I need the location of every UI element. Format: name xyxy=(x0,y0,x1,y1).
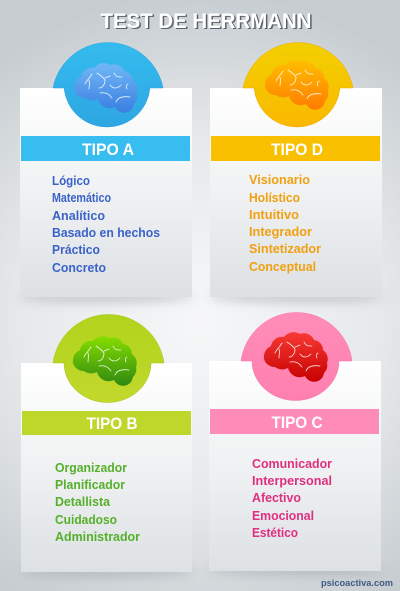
list A: Práctico xyxy=(52,242,100,257)
list B: Detallista xyxy=(55,494,111,509)
list A: Lógico xyxy=(52,173,90,188)
list D: Conceptual xyxy=(249,259,316,274)
icon: brain D xyxy=(265,60,329,110)
band A xyxy=(21,136,190,161)
title: TEST DE HERRMANN xyxy=(102,11,313,34)
heading D: TIPO D xyxy=(271,140,323,159)
card C xyxy=(209,361,381,571)
list A: Concreto xyxy=(52,260,106,275)
list B: Administrador xyxy=(55,529,140,544)
list D: Visionario xyxy=(249,172,310,187)
panel: tipo D xyxy=(208,43,384,303)
panel: tipo B xyxy=(19,314,195,578)
card A xyxy=(20,88,192,297)
list D: Holístico xyxy=(249,190,300,205)
icon: circle B xyxy=(53,314,164,402)
card B xyxy=(21,363,192,572)
icon: circle D xyxy=(243,43,353,127)
list A xyxy=(52,173,160,275)
list C xyxy=(252,456,332,540)
list B: Organizador xyxy=(55,460,127,475)
icon: circle A xyxy=(53,43,163,127)
icon: circle C xyxy=(241,312,352,400)
list C: Estético xyxy=(252,525,298,540)
list B: Cuidadoso xyxy=(55,512,117,527)
list C: Emocional xyxy=(252,508,314,523)
list B xyxy=(55,460,140,544)
card D xyxy=(210,88,382,297)
panel: tipo C xyxy=(207,312,383,576)
heading B: TIPO B xyxy=(86,414,138,433)
list D: Intuitivo xyxy=(249,207,299,222)
heading C: TIPO C xyxy=(272,413,322,432)
list D: Sintetizador xyxy=(249,241,321,256)
icon: brain C xyxy=(264,332,328,382)
title: TEST DE HERRMANN xyxy=(100,10,312,33)
list B: Planificador xyxy=(55,477,125,492)
list C: Afectivo xyxy=(252,490,301,505)
list A: Analítico xyxy=(52,208,105,223)
band C xyxy=(210,409,379,434)
list A: Basado en hechos xyxy=(52,225,160,240)
band D xyxy=(211,136,380,161)
panel: tipo A xyxy=(18,43,194,303)
list C: Interpersonal xyxy=(252,473,332,488)
icon: brain B xyxy=(73,336,137,386)
credit: psicoactiva.com: psicoactiva.com xyxy=(321,578,393,588)
list A: Matemático xyxy=(52,190,111,205)
list D xyxy=(249,172,321,274)
list D: Integrador xyxy=(249,224,312,239)
band B xyxy=(22,411,191,435)
list C: Comunicador xyxy=(252,456,332,471)
icon: brain A xyxy=(74,63,138,113)
heading A: TIPO A xyxy=(82,140,134,159)
